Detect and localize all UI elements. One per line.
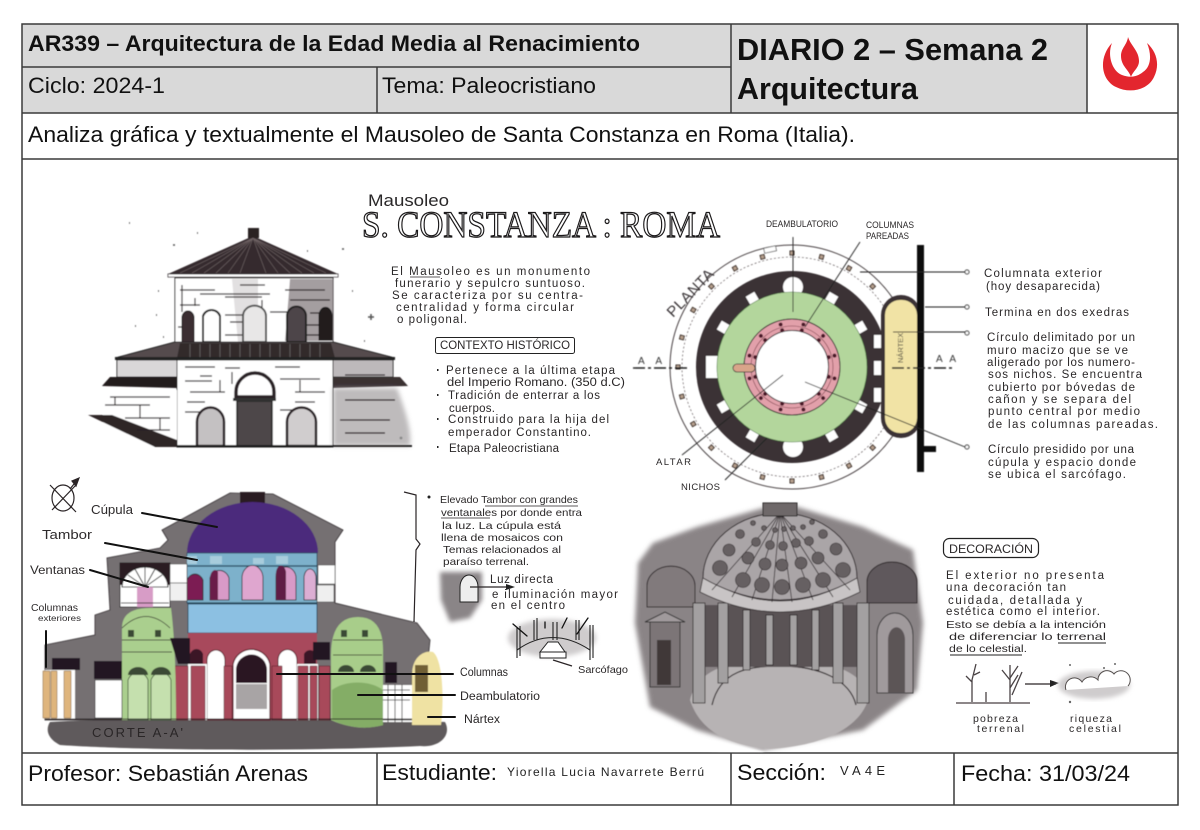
footer: professor: Profesor: Sebastián Arenas: [28, 761, 308, 786]
gray section silhouette: [45, 493, 430, 720]
text: luz directa: [490, 574, 618, 612]
roof cone: [168, 228, 338, 277]
text: plan annotations: sos nichos. Se encuentra: [988, 369, 1143, 381]
section labels and leader lines: Ventanas: [30, 563, 85, 577]
text: drum and dome note: Temas relacionados al: [443, 544, 561, 556]
heading: diary title: [737, 33, 1048, 106]
text: historical context bullets: Etapa Paleocristiana: [449, 443, 560, 455]
text: plan annotations: cubierto por bóvedas de: [988, 382, 1135, 394]
text: decoration explanation: una decoración tan: [946, 582, 1066, 594]
plan label: nichos: NICHOS: [681, 482, 720, 493]
outer colonnade ring: [670, 245, 914, 489]
lantern: [763, 503, 797, 516]
section labels and leader lines: [30, 503, 540, 740]
footer: section: Sección:: [737, 760, 826, 785]
floor: [690, 661, 868, 749]
label: pobreza terrenal: terrenal: [977, 723, 1024, 735]
text: plan annotations: cañon y se separa del: [988, 394, 1131, 406]
text: definition of mausoleum: funerario y sepulcro suntuoso.: [395, 278, 585, 290]
heading: Mausoleo S. Constanza Roma: S. CONSTANZA : ROMA: [362, 205, 720, 246]
text: plan annotations: [984, 268, 1158, 481]
label: sarcofago: [553, 660, 628, 676]
lower wall and portals: [88, 360, 412, 447]
heading: diary title: Arquitectura: [737, 72, 919, 106]
green right deambulatorio: [331, 617, 383, 728]
text: decoration explanation: Esto se debía a la intención: [946, 619, 1106, 631]
label: pobreza terrenal: [973, 713, 1024, 735]
text: definition of mausoleum: Se caracteriza por su centra-: [392, 290, 583, 302]
text: definition of mausoleum: [391, 266, 590, 326]
footer: student: Estudiante:: [382, 760, 497, 785]
footer: student: Yiorella Lucia Navarrete Berrú: [507, 765, 704, 779]
chart: cross-section A-A': [43, 492, 447, 750]
section marks: [633, 354, 956, 368]
colonnade background: [705, 605, 860, 667]
text: tema: Tema: Paleocristiano: [382, 73, 596, 98]
text: plan annotations: aligerado por los numero-: [987, 357, 1135, 369]
ground band: [48, 718, 447, 750]
icon: clouds, heavenly richness: [1058, 663, 1130, 703]
plan label: altar: ALTAR: [656, 457, 691, 468]
text: plan annotations: Termina en dos exedras: [985, 307, 1129, 319]
text: luz directa: Luz directa: [490, 574, 554, 586]
heading: diary title: DIARIO 2 – Semana 2: [737, 33, 1048, 67]
label: pobreza terrenal: pobreza: [973, 713, 1018, 725]
columns: [693, 603, 869, 703]
section labels and leader lines: exteriores: [38, 613, 81, 623]
section marks: AA: [936, 354, 956, 365]
text: plan annotations: Columnata exterior: [984, 268, 1102, 280]
text: drum and dome note: paraíso terrenal.: [443, 556, 529, 568]
footer: section: [737, 760, 885, 785]
text: drum and dome note: [428, 494, 582, 568]
icon: north arrow compass: [50, 478, 79, 512]
footer: section: VA4E: [840, 763, 885, 778]
text: definition of mausoleum: o poligonal.: [397, 314, 467, 326]
drawing: interior view of the dome: [635, 503, 923, 752]
section labels and leader lines: Deambulatorio: [460, 691, 540, 703]
icon: university flame logo: [1103, 37, 1157, 90]
section labels and leader lines: Cúpula: [91, 503, 133, 517]
blue lower drum: [188, 604, 317, 633]
plan label: columnas pareadas: [866, 220, 914, 242]
text: historical context bullets: Pertenece a la última etapa: [446, 365, 616, 377]
section labels and leader lines: Columnas: [460, 667, 508, 679]
section marks: AA: [638, 356, 662, 367]
section labels and leader lines: CORTE A-A': [92, 725, 183, 740]
text: plan annotations: (hoy desaparecida): [986, 281, 1100, 293]
text: historical context bullets: Tradición de enterrar a los: [448, 390, 600, 402]
side windows and fan: [120, 563, 335, 607]
text: historical context bullets: del Imperio Romano. (350 d.C): [447, 377, 625, 389]
dark fragments: [52, 638, 397, 683]
text: plan annotations: se ubica el sarcófago.: [988, 469, 1126, 481]
lower roofs: [102, 342, 408, 388]
white side room: [95, 680, 122, 718]
yellow narthex: [412, 652, 442, 725]
gray wash: [635, 507, 923, 750]
text: definition of mausoleum: El Mausoleo es un monumento: [391, 266, 590, 278]
text: historical context bullets: Construido para la hija del: [448, 414, 609, 426]
text: assignment prompt: Analiza gráfica y textualmente el Mausoleo de Santa Constanza en Roma (Italia).: [28, 122, 855, 147]
narthex: [881, 295, 921, 438]
footer: date: Fecha: 31/03/24: [961, 761, 1130, 786]
text: plan annotations: cúpula y espacio donde: [988, 457, 1136, 469]
footer: student: [382, 760, 704, 785]
arrow: poverty to richness: [1025, 680, 1059, 687]
decorative specks: [129, 223, 374, 341]
text: decoration explanation: de diferenciar lo terrenal: [949, 631, 1106, 643]
text: decoration explanation: cuidada, detallada y: [948, 595, 1082, 607]
callout: decoracion heading: [944, 538, 1038, 558]
text: decoration explanation: [946, 570, 1106, 655]
label: riqueza celestial: riqueza: [1070, 713, 1112, 725]
lantern: [240, 492, 265, 504]
text: plan annotations: muro macizo que se ve: [987, 345, 1128, 357]
text: drum and dome note: Elevado Tambor con grandes: [440, 494, 578, 506]
chart: floor plan of the mausoleum: [633, 237, 969, 489]
bracket linking section to note: [404, 492, 420, 622]
text: plan annotations: punto central por medio: [988, 406, 1140, 418]
text: historical context bullets: cuerpos.: [449, 403, 495, 415]
green left deambulatorio: [122, 608, 176, 720]
deambulatorio green ring: [717, 292, 867, 442]
callout: contexto historico: CONTEXTO HISTÓRICO: [440, 339, 570, 352]
plan label: columnas pareadas: PAREADAS: [866, 231, 909, 242]
section labels and leader lines: Tambor: [42, 527, 93, 542]
heading: course name: AR339 – Arquitectura de la Edad Media al Renacimiento: [28, 31, 640, 56]
plan label: columnas pareadas: COLUMNAS: [866, 220, 914, 231]
heading: Mausoleo S. Constanza Roma: Mausoleo: [368, 192, 449, 210]
drum, blue band with windows: [187, 553, 317, 603]
text: drum and dome note: ventanales por donde entra: [441, 507, 582, 519]
base line: [45, 718, 412, 720]
icon: sarcophagus sketch: [508, 618, 596, 660]
text: plan annotations: Círculo presidido por una: [988, 444, 1135, 456]
drawing: exterior elevation of the mausoleum: [88, 223, 412, 447]
leader dots: [965, 270, 969, 449]
plan title: PLANTA: [664, 266, 718, 321]
leader lines: [682, 237, 965, 480]
dome, purple: [187, 502, 318, 553]
red arcade: [175, 633, 330, 720]
callout: decoracion heading: DECORACIÓN: [949, 543, 1033, 556]
icon: window with direct light: [440, 572, 515, 622]
label: riqueza celestial: celestial: [1069, 723, 1121, 735]
narthex: NÁRTEX: [896, 333, 905, 363]
label: sarcofago: Sarcófago: [578, 664, 628, 676]
plan label: deambulatorio: DEAMBULATORIO: [766, 219, 838, 230]
text: definition of mausoleum: centralidad y forma circular: [396, 302, 574, 314]
text: drum and dome note: la luz. La cúpula está: [442, 520, 561, 532]
section labels and leader lines: Columnas: [31, 603, 78, 614]
text: drum and dome note: llena de mosaicos con: [441, 532, 563, 544]
text: plan annotations: de las columnas pareadas.: [988, 419, 1158, 431]
text: historical context bullets: emperador Constantino.: [448, 427, 591, 439]
text: ciclo: Ciclo: 2024-1: [28, 73, 165, 98]
drum wall: [175, 278, 333, 342]
thick boundary bar: [917, 245, 936, 472]
white ground behind exterior columns: [45, 670, 75, 719]
thick outer wall with niches: [696, 271, 888, 463]
icon: bare trees, earthly poverty: [956, 664, 1030, 703]
label: riqueza celestial: [1069, 713, 1121, 735]
text: luz directa: e iluminación mayor: [492, 589, 618, 601]
section labels and leader lines: Nártex: [464, 714, 500, 726]
text: plan annotations: Círculo delimitado por un: [987, 332, 1135, 344]
pink ring of paired columns: [733, 319, 840, 415]
text: luz directa: en el centro: [491, 600, 565, 612]
text: decoration explanation: estética como el interior.: [946, 606, 1100, 618]
right grille: [383, 685, 412, 722]
dome ring: [700, 577, 860, 612]
exterior columns, tan: [43, 671, 71, 718]
text: decoration explanation: de lo celestial.: [949, 643, 1027, 655]
text: decoration explanation: El exterior no presenta: [946, 570, 1105, 582]
dome with coffers: [703, 513, 857, 602]
text: historical context bullets: [437, 365, 625, 455]
